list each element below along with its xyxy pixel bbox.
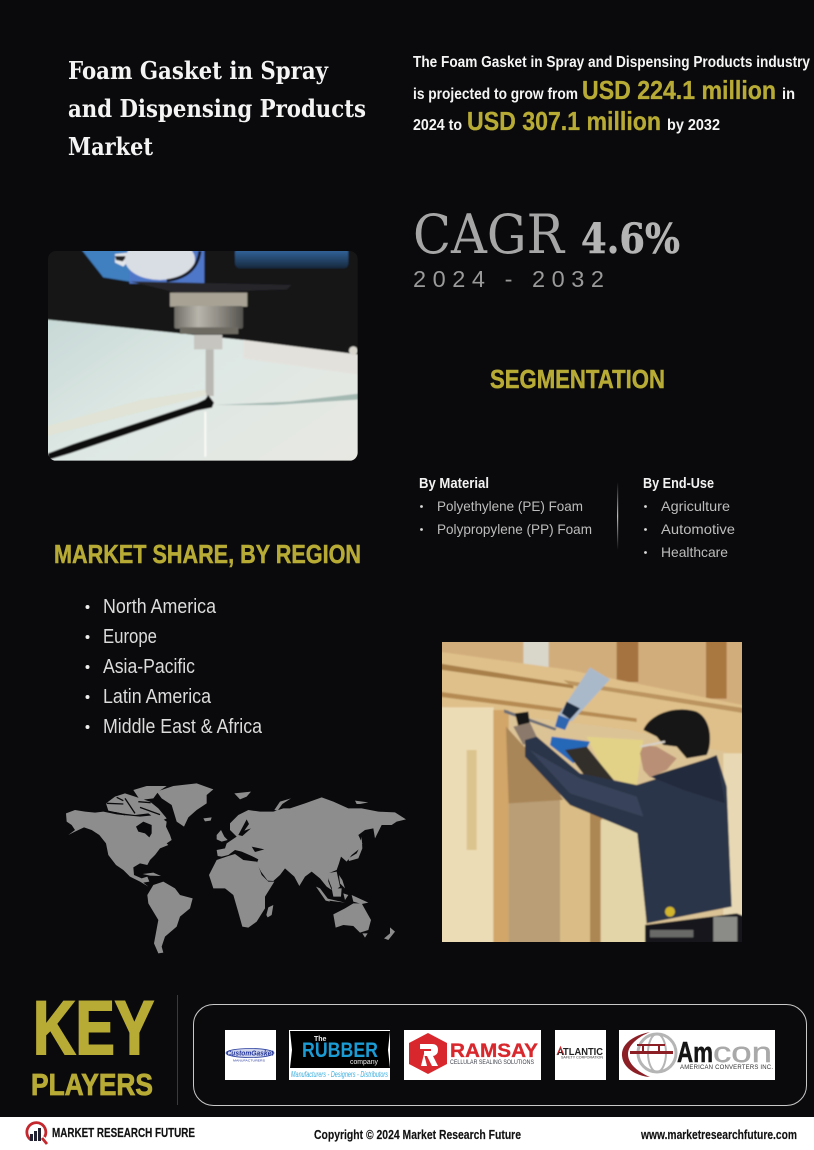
footer bar <box>0 1117 814 1150</box>
logo: Amcon <box>619 1030 775 1080</box>
logo: The Rubber Company: The <box>314 1036 327 1043</box>
segment list: by material: Polypropylene (PP) Foam <box>437 521 592 537</box>
logo: Ramsay <box>404 1030 541 1080</box>
photo: worker applying spray foam <box>439 639 745 945</box>
logo: Atlantic: ATLANTIC <box>557 1047 603 1058</box>
key players heading <box>31 986 154 1102</box>
heading: market share by region: MARKET SHARE, BY REGION <box>54 539 361 569</box>
key players heading: KEY <box>33 986 154 1071</box>
icon: market research future magnifier <box>27 1123 47 1144</box>
segment list: by end-use: Healthcare <box>661 544 728 560</box>
segment list: by end-use <box>643 476 735 560</box>
logo: Ramsay: CELLULAR SEALING SOLUTIONS <box>450 1059 535 1066</box>
footer bar: Copyright © 2024 Market Research Future <box>314 1128 521 1142</box>
region list: Europe <box>103 626 157 648</box>
logo: Amcon: con <box>713 1037 772 1069</box>
market growth statement: USD 307.1 million <box>467 106 661 136</box>
segment list: by material <box>419 476 592 537</box>
world map <box>66 783 406 953</box>
logo: Atlantic <box>555 1030 606 1080</box>
market growth statement <box>413 54 810 136</box>
title <box>68 56 366 161</box>
region list <box>86 596 263 738</box>
key players panel <box>194 1004 806 1106</box>
map: Eurasia, Africa and Oceania <box>209 792 406 940</box>
map: Americas and Greenland <box>66 783 213 953</box>
market growth statement: in <box>782 86 795 103</box>
region list: North America <box>103 596 217 618</box>
segment list: by material: By Material <box>419 476 489 492</box>
logo: Custom Gasket: CustomGasket <box>226 1050 274 1058</box>
market growth statement: 2024 to <box>413 117 462 134</box>
market growth statement: by 2032 <box>667 117 720 134</box>
logo: The Rubber Company: Manufacturers - Designers - Distributors <box>291 1070 388 1079</box>
logo: Amcon: AMERICAN CONVERTERS INC. <box>680 1065 773 1071</box>
market growth statement: is projected to grow from <box>413 86 578 103</box>
logo: Atlantic: SAFETY CORPORATION <box>561 1056 603 1060</box>
segment list: by end-use: Agriculture <box>661 498 730 514</box>
region list: Latin America <box>103 686 212 708</box>
heading: segmentation: SEGMENTATION <box>490 364 665 394</box>
market growth statement: USD 224.1 million <box>582 75 776 105</box>
region list: Middle East & Africa <box>103 716 263 738</box>
CAGR figure: CAGR <box>413 203 565 266</box>
logo: Custom Gasket <box>225 1030 276 1080</box>
CAGR figure <box>413 203 680 292</box>
logo: Custom Gasket: MANUFACTURERS <box>233 1058 265 1062</box>
footer bar: MARKET RESEARCH FUTURE <box>52 1126 195 1140</box>
title: Foam Gasket in Spray <box>68 56 329 85</box>
segment list: by end-use: Automotive <box>661 521 735 537</box>
key players heading: PLAYERS <box>31 1067 153 1102</box>
segment list: by end-use: By End-Use <box>643 476 714 492</box>
segment list: by material: Polyethylene (PE) Foam <box>437 498 583 514</box>
region list: Asia-Pacific <box>103 656 195 678</box>
logo: The Rubber Company: company <box>350 1059 378 1066</box>
logo: Amcon: Am <box>677 1037 713 1069</box>
photo: foam gasket dispensing nozzle <box>45 239 361 464</box>
CAGR figure: 4.6% <box>581 215 680 263</box>
logo: The Rubber Company <box>289 1030 390 1080</box>
CAGR figure: 2024 - 2032 <box>413 266 604 292</box>
title: and Dispensing Products <box>68 94 366 123</box>
logo: Ramsay: RAMSAY <box>450 1040 538 1062</box>
logo: The Rubber Company: RUBBER <box>302 1039 378 1062</box>
title: Market <box>68 132 153 161</box>
